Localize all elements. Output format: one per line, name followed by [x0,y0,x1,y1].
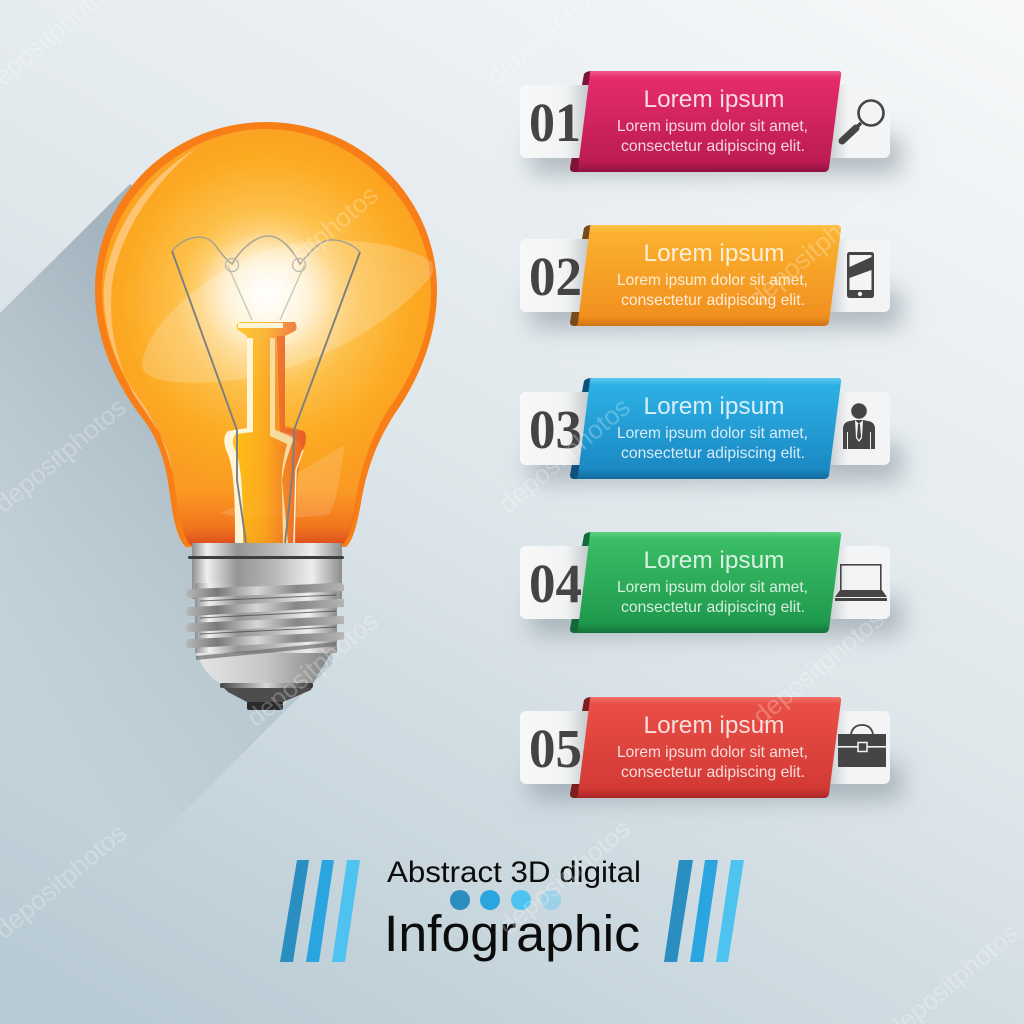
card shadow [530,290,902,328]
heading: Lorem ipsum [644,712,784,739]
number card [520,546,890,619]
description: Lorem ipsum dolor sit amet, [617,118,808,135]
long shadow of bulb [0,184,333,996]
item 02: consectetur adipiscing elit. [621,292,805,309]
item 04 [520,532,902,635]
number: 04 [529,553,582,614]
heading: Lorem ipsum [644,240,784,267]
ribbon [574,225,841,326]
watermarks: depositphotos [493,392,636,519]
watermarks: depositphotos [747,604,890,731]
left rim highlight [104,148,197,470]
item 04: consectetur adipiscing elit. [621,599,805,616]
watermarks: depositphotos [493,814,636,941]
description: Lorem ipsum dolor sit amet, [617,744,808,761]
watermarks: depositphotos [241,180,384,307]
number card [520,711,890,784]
heading: Lorem ipsum [644,547,784,574]
number card [520,85,890,158]
item 03 [520,378,902,481]
screw base [186,543,344,710]
item 05 [520,697,902,800]
ribbon fold [570,532,600,633]
item 01 [520,71,902,174]
title: Infographic [384,905,640,962]
ribbon fold [570,378,600,479]
item 05: consectetur adipiscing elit. [621,764,805,781]
heading: Lorem ipsum [644,393,784,420]
glass reflection [142,241,433,383]
center glare [198,230,338,354]
ribbon fold [570,225,600,326]
description: Lorem ipsum dolor sit amet, [617,579,808,596]
thread gaps [200,595,336,634]
bulb glass [95,122,437,547]
ribbon [574,378,841,479]
cone bottom [196,644,336,685]
screw threads [186,583,344,648]
number: 05 [529,718,582,779]
number card [520,392,890,465]
item 02 [520,225,902,328]
heading: Lorem ipsum [644,86,784,113]
card shadow [530,762,902,800]
description: Lorem ipsum dolor sit amet, [617,425,808,442]
icon: laptop [835,565,887,601]
number: 01 [529,92,581,153]
bulb inner glow [102,129,431,541]
card shadow [530,136,902,174]
collar [192,543,342,599]
dots [450,890,561,910]
ribbon fold [570,71,600,172]
description: Lorem ipsum dolor sit amet, [617,272,808,289]
contact cap [220,684,313,709]
ribbon [574,532,841,633]
subtitle: Abstract 3D digital [387,856,641,889]
number card [520,239,890,312]
icon: briefcase [838,725,886,767]
item 03: consectetur adipiscing elit. [621,445,805,462]
ribbon [574,71,841,172]
ribbon fold [570,697,600,798]
left stripes [280,860,360,962]
watermarks: depositphotos [241,606,384,733]
ribbon [574,697,841,798]
card shadow [530,597,902,635]
number: 02 [529,246,582,307]
icon: businessman [843,403,875,449]
icon: magnifier [842,100,884,141]
filament stem [224,322,306,543]
right stripes [664,860,744,962]
bulb base glow [175,490,359,545]
item 01: consectetur adipiscing elit. [621,138,805,155]
filament wires [172,236,360,543]
light bulb [95,122,437,710]
watermarks: depositphotos [743,186,886,313]
lower reflection [221,445,345,518]
card shadow [530,443,902,481]
icon: smartphone [847,252,874,298]
number: 03 [529,399,582,460]
dark ring [188,556,344,559]
